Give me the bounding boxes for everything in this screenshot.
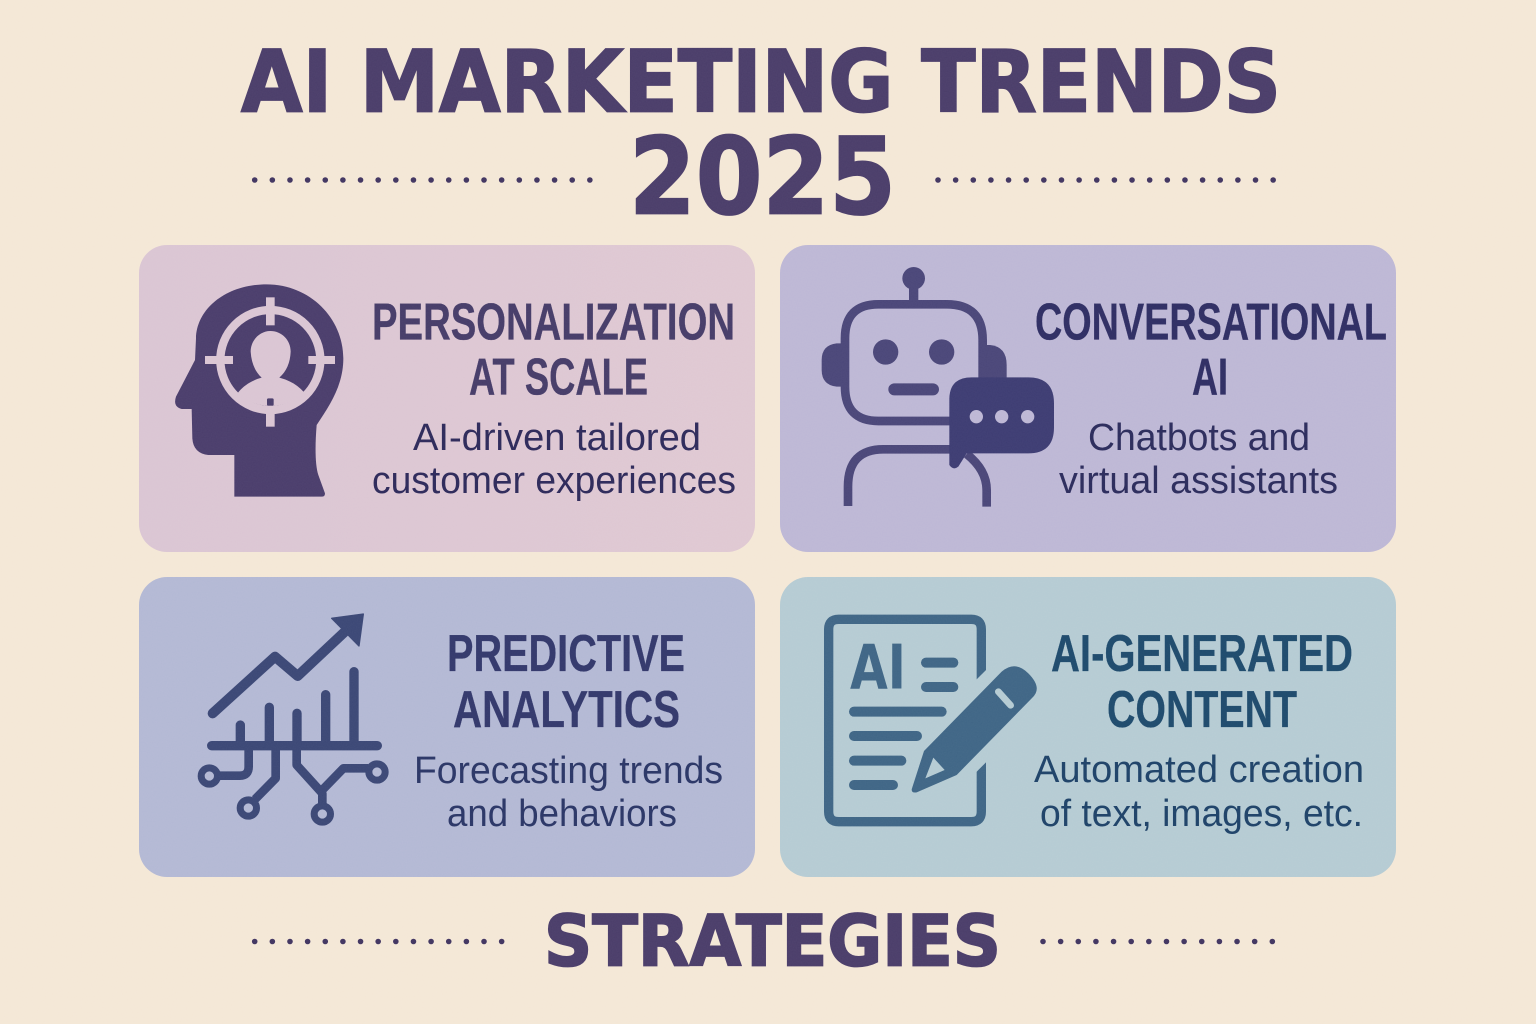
panel: personalization at scale	[139, 245, 755, 552]
description: Chatbots and	[1088, 417, 1310, 459]
description	[1059, 417, 1338, 502]
icon: document with pencil	[829, 619, 1037, 822]
panel: AI-generated content	[780, 577, 1396, 877]
footer heading: STRATEGIES	[544, 900, 1001, 982]
heading: AT SCALE	[469, 348, 648, 406]
icon: document with pencil: AI	[850, 631, 906, 703]
heading: PREDICTIVE	[447, 625, 685, 683]
heading	[1051, 625, 1353, 739]
description: and behaviors	[447, 793, 677, 835]
icon: head with target	[175, 284, 343, 497]
heading	[372, 294, 735, 406]
description	[1034, 749, 1364, 835]
heading: CONTENT	[1107, 681, 1297, 739]
description	[372, 417, 736, 502]
title: AI MARKETING TRENDS	[241, 32, 1281, 132]
description: Forecasting trends	[414, 750, 723, 792]
panel: conversational AI	[780, 245, 1396, 552]
description: of text, images, etc.	[1040, 793, 1363, 835]
description	[414, 750, 723, 835]
icon: robot with chat bubble	[822, 267, 1054, 507]
description: customer experiences	[372, 460, 736, 502]
panel: predictive analytics	[139, 577, 755, 877]
heading: CONVERSATIONAL	[1035, 294, 1387, 352]
heading	[447, 625, 685, 739]
heading	[1035, 294, 1387, 406]
heading: ANALYTICS	[453, 681, 680, 739]
icon: chart with circuit	[201, 614, 385, 822]
heading: PERSONALIZATION	[372, 294, 735, 352]
description: AI-driven tailored	[413, 417, 701, 459]
heading: AI	[1192, 348, 1228, 406]
description: virtual assistants	[1059, 460, 1338, 502]
heading: AI-GENERATED	[1051, 625, 1353, 683]
description: Automated creation	[1034, 749, 1364, 791]
subtitle: year: 2025	[629, 116, 896, 238]
